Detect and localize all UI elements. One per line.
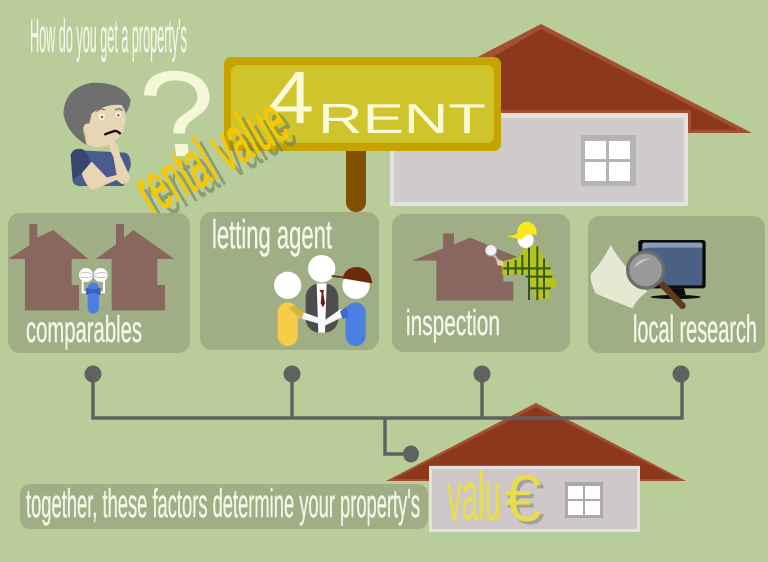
inspection illustration (412, 222, 558, 301)
label: letting agent (212, 213, 332, 257)
large house (390, 24, 752, 206)
label: inspection (406, 302, 500, 343)
label: comparables (26, 309, 142, 350)
cap (343, 267, 372, 283)
head and hat (518, 232, 534, 248)
infographic canvas: How do you get a property's (30, 9, 187, 62)
for rent sign (224, 56, 501, 151)
value word with euro sign: valu (447, 457, 501, 535)
small house (386, 403, 686, 532)
euro sign: € (504, 461, 542, 535)
conclusion text strip (20, 482, 428, 529)
paper (591, 245, 647, 308)
inspector body (502, 246, 558, 300)
shirt (71, 149, 131, 186)
monitor (638, 240, 706, 288)
hair (63, 83, 131, 145)
panel: inspection (392, 214, 570, 352)
panel: letting agent (200, 212, 379, 350)
comparable houses and figure (8, 224, 174, 314)
panel: local research (588, 216, 765, 353)
right house (96, 224, 174, 310)
numeral 4: 4 (268, 56, 314, 139)
house (412, 233, 521, 301)
research illustration (591, 240, 706, 308)
arm and hand (82, 141, 130, 190)
question mark: ? (131, 46, 227, 182)
euro shadow: € (507, 464, 545, 538)
figure with glasses (79, 268, 108, 314)
magnifier (663, 285, 682, 306)
hand (496, 258, 503, 266)
magnifier (485, 245, 497, 256)
left house (8, 224, 88, 310)
face and neck (84, 104, 126, 147)
sign post (346, 148, 366, 212)
thinking person (63, 83, 131, 190)
eyes (98, 113, 105, 120)
moustache (104, 131, 121, 135)
panel: comparables (8, 213, 190, 353)
rental value shadow: rental value (130, 88, 308, 235)
handshake figures (274, 255, 372, 346)
word RENT: RENT (318, 95, 486, 142)
connector lines (84, 366, 690, 462)
